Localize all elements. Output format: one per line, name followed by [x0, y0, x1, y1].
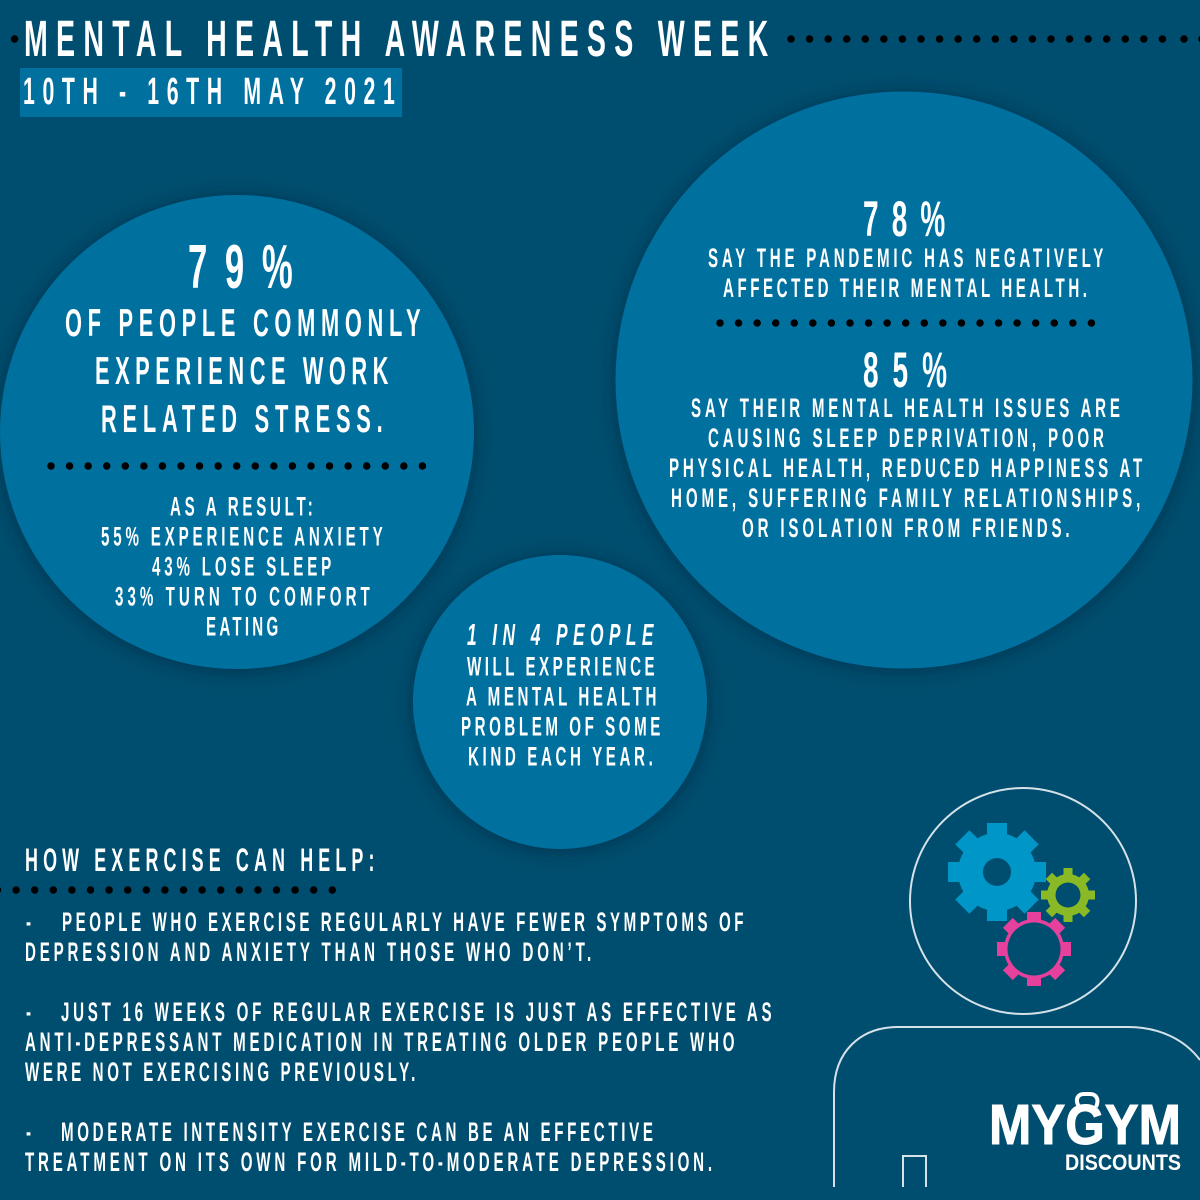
- heading: work related stress: [65, 300, 421, 441]
- logo: My Gym Discounts: MYGYM: [989, 1093, 1181, 1157]
- text: issues: HOME, SUFFERING FAMILY RELATIONSHIPS,: [671, 482, 1140, 513]
- title dotted line left: [0, 35, 15, 43]
- date banner: 10TH - 16TH MAY 2021: [23, 69, 395, 113]
- text: exercise benefits: [25, 906, 772, 1177]
- arm gap: [903, 1156, 926, 1187]
- text: mental health problem: WILL EXPERIENCE: [467, 651, 655, 682]
- logo: My Gym Discounts: DISCOUNTS: [1065, 1150, 1181, 1175]
- text: exercise benefits: -: [26, 996, 31, 1027]
- text: exercise benefits: DEPRESSION AND ANXIETY THAN THOSE WHO DON’T.: [25, 936, 591, 967]
- text: results: 43% LOSE SLEEP: [152, 551, 331, 582]
- text: results: AS A RESULT:: [170, 491, 313, 522]
- stat: 79%: 79%: [188, 232, 293, 302]
- body outline: [834, 1027, 1200, 1187]
- dotted divider: [720, 319, 1094, 327]
- kettlebell handle: [1077, 1094, 1097, 1107]
- heading: work related stress: RELATED STRESS.: [101, 396, 383, 441]
- text: mental health problem: PROBLEM OF SOME: [461, 711, 660, 742]
- text: pandemic effect: AFFECTED THEIR MENTAL HEALTH.: [723, 272, 1087, 303]
- text: results: EATING: [206, 611, 278, 642]
- text: pandemic effect: [708, 242, 1104, 303]
- heading: how exercise can help: HOW EXERCISE CAN HELP:: [25, 844, 374, 878]
- text: exercise benefits: ANTI-DEPRESSANT MEDICATION IN TREATING OLDER PEOPLE WHO: [25, 1026, 735, 1057]
- icon: person with gears: [834, 788, 1200, 1187]
- title dotted line right: [791, 35, 1200, 43]
- panel: 1 in 4 circle: [411, 555, 709, 853]
- dotted divider: [0, 886, 335, 894]
- icon: pink gear: [997, 912, 1071, 986]
- dotted divider: [51, 462, 423, 470]
- icon: blue gear: [948, 823, 1046, 921]
- text: pandemic effect: SAY THE PANDEMIC HAS NEGATIVELY: [708, 242, 1104, 273]
- text: exercise benefits: -: [26, 906, 31, 937]
- text: exercise benefits: MODERATE INTENSITY EXERCISE CAN BE AN EFFECTIVE: [61, 1116, 653, 1147]
- title: MENTAL HEALTH AWARENESS WEEK: [24, 10, 768, 67]
- icon: green gear: [1041, 868, 1095, 922]
- text: results: 55% EXPERIENCE ANXIETY: [101, 521, 383, 552]
- heading: work related stress: OF PEOPLE COMMONLY: [65, 300, 421, 345]
- text: mental health problem: KIND EACH YEAR.: [468, 741, 653, 772]
- text: exercise benefits: -: [26, 1116, 31, 1147]
- panel: pandemic circle: [614, 92, 1194, 672]
- text: mental health problem: A MENTAL HEALTH: [466, 681, 656, 712]
- heading: work related stress: EXPERIENCE WORK: [95, 348, 389, 393]
- stat: 85%: 85%: [863, 341, 947, 398]
- text: exercise benefits: WERE NOT EXERCISING PREVIOUSLY.: [25, 1056, 415, 1087]
- text: exercise benefits: JUST 16 WEEKS OF REGULAR EXERCISE IS JUST AS EFFECTIVE AS: [61, 996, 772, 1027]
- panel: work stress circle: [0, 195, 476, 673]
- text: results: 33% TURN TO COMFORT: [115, 581, 370, 612]
- text: results: [101, 491, 383, 642]
- text: issues: SAY THEIR MENTAL HEALTH ISSUES ARE: [691, 392, 1120, 423]
- text: mental health problem: [461, 651, 660, 772]
- stat: 78%: 78%: [863, 190, 945, 247]
- text: exercise benefits: PEOPLE WHO EXERCISE REGULARLY HAVE FEWER SYMPTOMS OF: [62, 906, 744, 937]
- text: exercise benefits: TREATMENT ON ITS OWN FOR MILD-TO-MODERATE DEPRESSION.: [25, 1146, 712, 1177]
- stat: 1 in 4 people: 1 IN 4 PEOPLE: [467, 618, 654, 652]
- text: issues: OR ISOLATION FROM FRIENDS.: [742, 512, 1070, 543]
- text: issues: CAUSING SLEEP DEPRIVATION, POOR: [708, 422, 1104, 453]
- text: issues: [669, 392, 1143, 543]
- text: issues: PHYSICAL HEALTH, REDUCED HAPPINESS AT: [669, 452, 1143, 483]
- head outline: [910, 788, 1136, 1014]
